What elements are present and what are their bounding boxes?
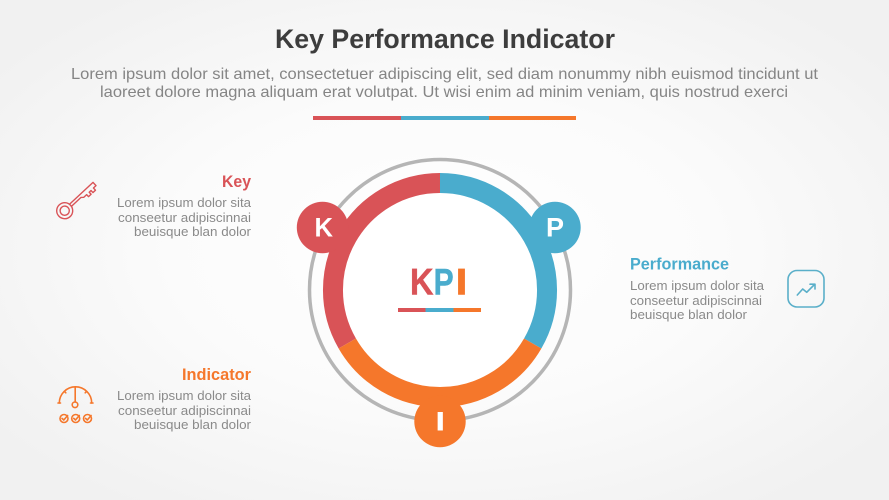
ring segment: performance	[440, 183, 547, 344]
center KPI label: K	[410, 262, 434, 302]
icon: growth chart	[788, 270, 824, 307]
badge I	[414, 396, 466, 447]
text block: Performance: conseetur adipiscinnai	[630, 293, 762, 308]
badge K: K	[314, 213, 333, 243]
ring segment: indicator	[347, 344, 533, 397]
text block: Performance: Lorem ipsum dolor sita	[630, 278, 765, 293]
text block: Performance: Performance	[630, 254, 729, 274]
outer grey ring	[310, 160, 570, 420]
text block: Key: Lorem ipsum dolor sita	[117, 195, 252, 210]
text block: Indicator	[117, 365, 252, 432]
title: Key Performance Indicator	[275, 24, 615, 54]
icon: key	[53, 178, 99, 222]
text block: Key: conseetur adipiscinnai	[118, 210, 251, 225]
circular KPI diagram	[297, 160, 581, 447]
text block: Indicator: conseetur adipiscinnai	[118, 403, 251, 418]
intro text	[71, 66, 819, 101]
white inner disc	[323, 173, 557, 407]
text block: Indicator: Lorem ipsum dolor sita	[117, 388, 252, 403]
center underline	[398, 308, 481, 312]
badge K	[297, 202, 348, 253]
center KPI label: I	[456, 262, 468, 302]
text block: Performance	[630, 254, 765, 322]
badge P: P	[546, 213, 564, 243]
intro text: laoreet dolore magna aliquam erat volutpat. Ut wisi enim ad minim veniam, quis nostrud exerci	[100, 84, 788, 101]
center KPI label: P	[434, 262, 454, 302]
badge P	[529, 202, 581, 253]
intro text: Lorem ipsum dolor sit amet, consectetuer adipiscing elit, sed diam nonummy nibh euismod tincidunt ut	[71, 66, 819, 83]
text block: Key: beuisque blan dolor	[134, 224, 252, 239]
text block: Key	[117, 172, 252, 239]
title underline	[313, 116, 576, 120]
badge I: I	[435, 407, 445, 437]
text block: Indicator: beuisque blan dolor	[134, 417, 252, 432]
icon: gauge with checks	[58, 387, 93, 422]
text block: Key: Key	[222, 172, 252, 191]
center KPI label	[410, 262, 468, 302]
text block: Performance: beuisque blan dolor	[630, 307, 748, 322]
text block: Indicator: Indicator	[182, 365, 251, 384]
ring segment: key	[333, 183, 440, 344]
